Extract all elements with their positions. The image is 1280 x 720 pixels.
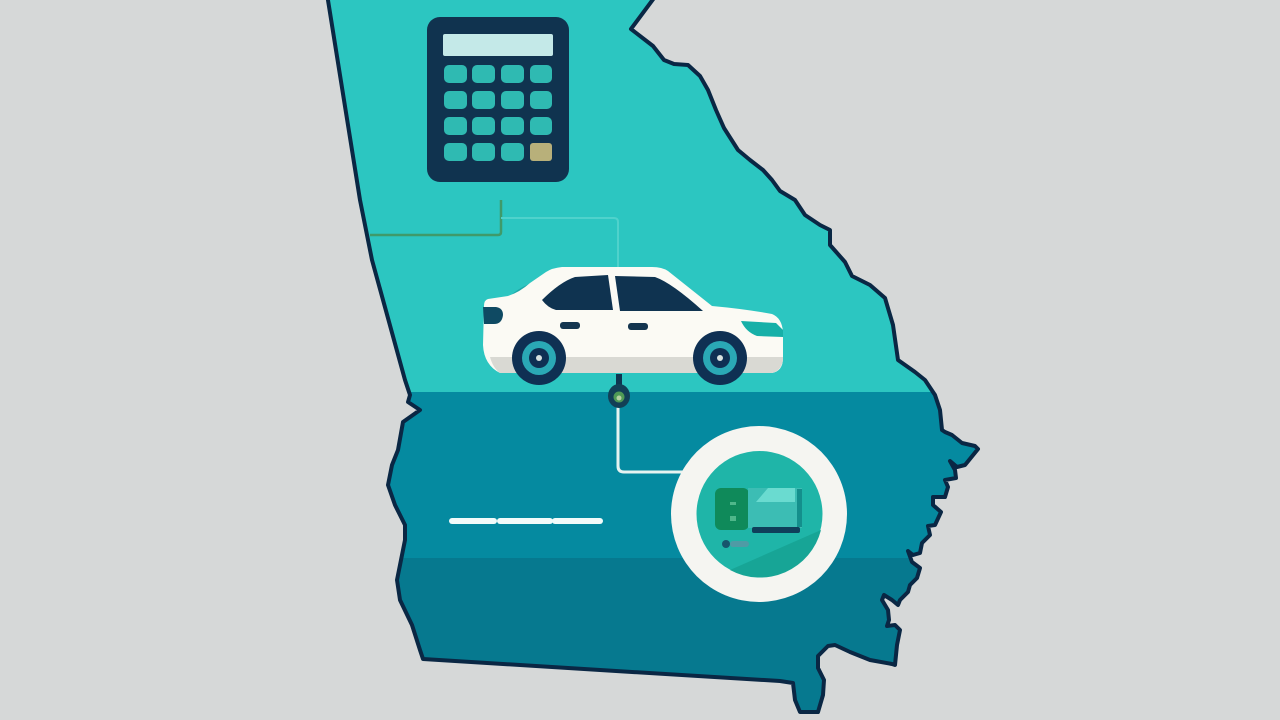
badge green wallet — [715, 488, 749, 530]
car streak — [510, 279, 550, 296]
badge lower wedge — [730, 530, 821, 578]
white dashed bar — [449, 518, 603, 524]
calculator screen — [443, 34, 553, 56]
connector node under car — [608, 374, 630, 408]
car rear window — [542, 275, 613, 310]
badge panel — [748, 488, 802, 533]
connector: green line from border to calculator — [370, 200, 501, 235]
door handles — [560, 322, 580, 329]
icon: money badge — [671, 426, 847, 602]
icon: calculator — [427, 17, 569, 182]
car sill — [490, 357, 783, 373]
map: Georgia state shape — [300, 0, 1000, 720]
front wheel — [693, 331, 747, 385]
calculator keys — [444, 65, 552, 161]
icon: car — [483, 267, 783, 385]
connector: faint line from calculator to car — [501, 218, 618, 270]
white connector from car to coin circle — [618, 405, 690, 472]
car body — [483, 267, 783, 373]
badge pill — [722, 540, 749, 548]
headlight — [741, 321, 783, 337]
tail light — [483, 307, 503, 324]
illustration canvas — [326, 0, 980, 714]
rear wheel — [512, 331, 566, 385]
car front window — [615, 276, 703, 311]
